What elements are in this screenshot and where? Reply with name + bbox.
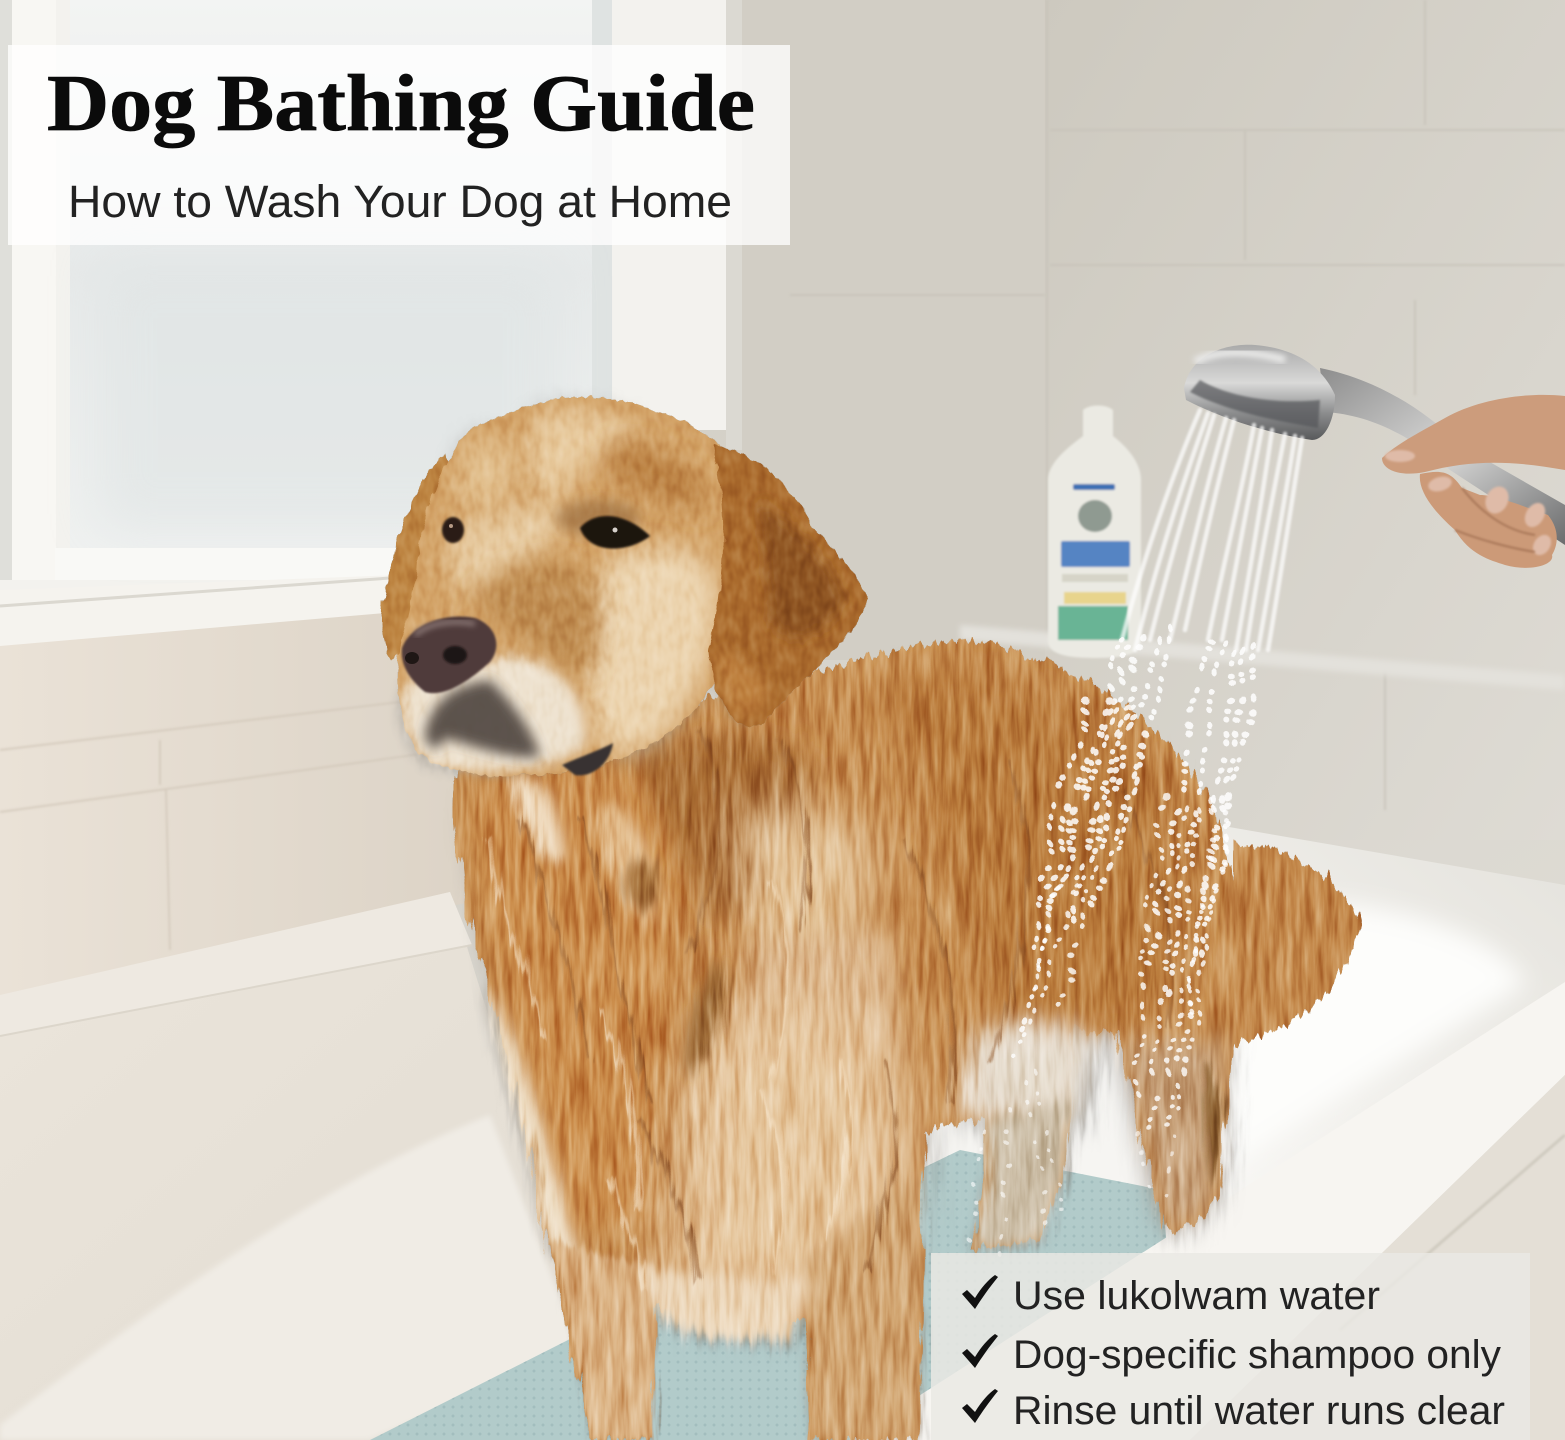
shower handle bbox=[1320, 368, 1565, 545]
dog: right eye bbox=[580, 516, 650, 549]
hand bbox=[1382, 395, 1565, 474]
dog: forehead light bbox=[529, 411, 640, 510]
dog: skull and face bbox=[398, 397, 729, 776]
dog: head bbox=[381, 397, 868, 776]
dog: streak strands light bbox=[485, 840, 851, 1290]
dog: fringe on rear leg bbox=[1205, 1060, 1223, 1190]
dog: upper chest light fur bbox=[735, 806, 875, 1000]
dog: right foreleg bbox=[806, 1170, 920, 1440]
dog: eye shadow bbox=[556, 500, 640, 536]
checklist item 3: Rinse until water runs clear bbox=[1013, 1389, 1505, 1433]
water droplets bbox=[1020, 630, 1258, 1030]
bathtub: outer left side bbox=[0, 892, 620, 1440]
bathtub: front rim bbox=[850, 982, 1565, 1440]
water streams near head bbox=[1122, 410, 1302, 650]
dog: bridge tan patch bbox=[480, 562, 599, 680]
dog: left eye bbox=[442, 517, 464, 543]
dog: chest central dark stripe bbox=[686, 960, 725, 1080]
dog: nose bbox=[402, 617, 496, 693]
dog: right ear bbox=[708, 445, 868, 727]
dog: muzzle bbox=[402, 655, 586, 771]
dog: cheek cream bbox=[590, 547, 717, 753]
checklist item 1: Use lukolwam water bbox=[1013, 1274, 1380, 1318]
dog: neck dark fur bbox=[640, 738, 810, 920]
dog: chest spot bbox=[625, 859, 659, 907]
dog: belly pale bbox=[960, 1021, 1100, 1130]
dog: left ear bbox=[381, 455, 450, 660]
dog: bridge of nose light bbox=[449, 506, 562, 592]
dog: streak strands dark bbox=[520, 730, 1173, 1280]
dog: hind leg pale bbox=[970, 1100, 1068, 1250]
checklist item 2: Dog-specific shampoo only bbox=[1013, 1333, 1501, 1377]
shampoo bottle bbox=[1048, 406, 1141, 658]
hand holding shower bbox=[1184, 345, 1565, 568]
dog: mid chest bridge bbox=[730, 930, 900, 1060]
shower head bbox=[1184, 345, 1335, 440]
title panel bbox=[8, 45, 790, 245]
water spray bbox=[965, 410, 1302, 1250]
checklist panel bbox=[931, 1253, 1530, 1440]
left tiled wall bbox=[0, 610, 480, 1000]
dog: collar bbox=[562, 743, 613, 775]
subtitle: How to Wash Your Dog at Home bbox=[68, 176, 732, 227]
dog bbox=[381, 397, 1358, 1440]
dog: body bbox=[452, 640, 1358, 1440]
dog: lower chest light fur bbox=[660, 1003, 910, 1309]
background: right tiled wall bbox=[0, 0, 1565, 1000]
bathtub: interior bbox=[800, 822, 1565, 1440]
dog: tail bbox=[1228, 842, 1358, 1045]
dog: chest orange side bbox=[470, 769, 686, 1230]
dog: leg fringe bbox=[640, 1270, 810, 1345]
dog: pale outer chest edge bbox=[485, 990, 580, 1260]
dog: left foreleg bbox=[550, 1240, 655, 1440]
dog: mouth dark patch bbox=[425, 680, 540, 757]
dog: brow orange bbox=[610, 444, 710, 510]
non-slip bath mat bbox=[370, 1150, 1168, 1440]
window bbox=[0, 0, 742, 650]
title: Dog Bathing Guide bbox=[47, 60, 755, 148]
dog: torso and legs bbox=[452, 640, 1239, 1440]
dog: chest strip light bbox=[510, 778, 565, 862]
dog: back shading bbox=[880, 670, 1198, 1048]
dog: rear leg bbox=[1120, 1040, 1225, 1231]
